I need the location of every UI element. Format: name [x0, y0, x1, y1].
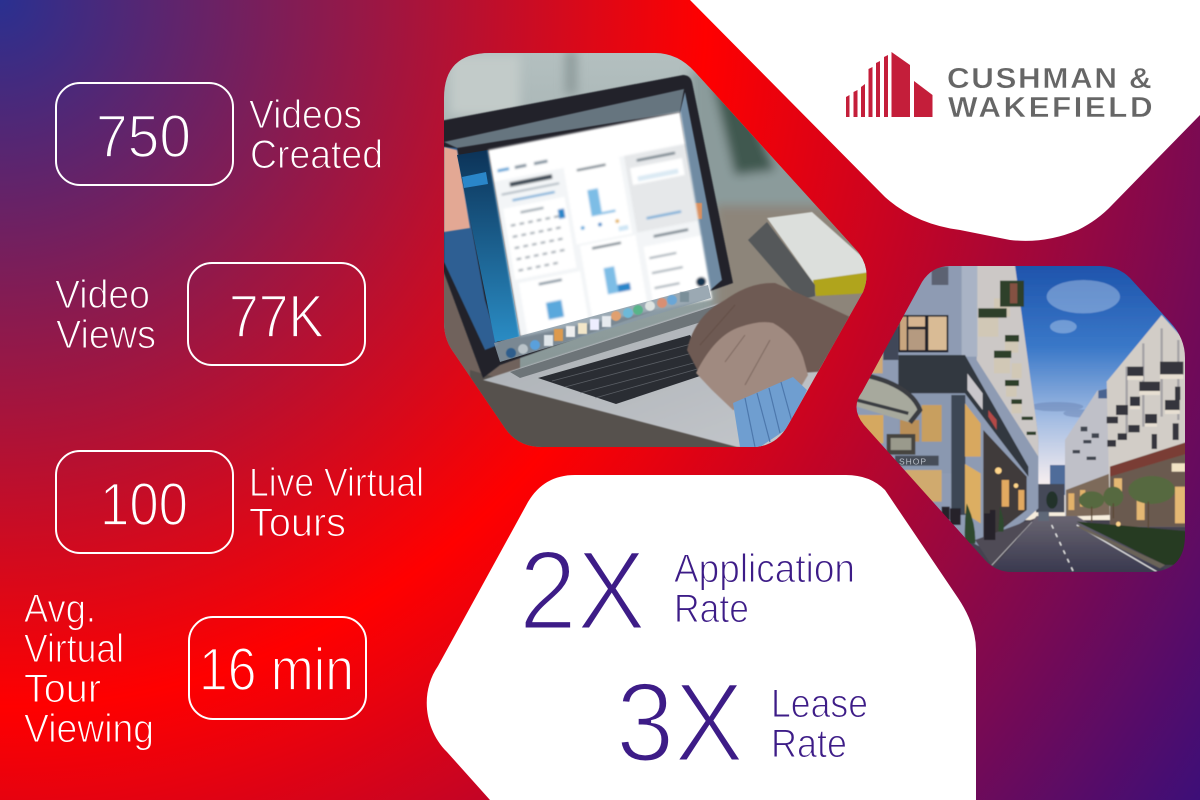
warm storefronts right	[1114, 478, 1185, 523]
stat number: 750	[96, 103, 191, 170]
photo: retail street at dusk	[856, 266, 1185, 572]
result label: Rate	[771, 722, 847, 766]
sidebar	[457, 150, 520, 342]
stat label	[55, 273, 156, 357]
perspective facade	[977, 253, 1038, 457]
desk lower-left	[444, 272, 520, 442]
stat label: Views	[56, 313, 156, 357]
stat label: Tour	[24, 667, 101, 711]
trees right	[1079, 476, 1175, 509]
shop sign	[895, 456, 939, 466]
stat label: Avg.	[24, 587, 96, 631]
sky	[1014, 266, 1180, 521]
lamps	[995, 467, 1121, 526]
result label: Rate	[674, 587, 749, 631]
stat: 100 live virtual tours	[56, 451, 424, 553]
result: 2X application rate	[519, 528, 855, 653]
canopy	[856, 378, 918, 423]
result label: Lease	[771, 682, 868, 726]
stat label: Virtual	[24, 627, 124, 671]
calendar card	[503, 197, 577, 280]
wordmark	[947, 63, 1153, 124]
window frame top	[932, 267, 948, 285]
far right building	[1107, 315, 1193, 527]
dark shop band	[898, 355, 1028, 477]
balconies left	[978, 298, 1022, 413]
wallpaper	[444, 147, 498, 350]
stat label: Live Virtual	[249, 461, 424, 505]
stat: 16 min average viewing	[24, 587, 366, 751]
left building upper	[856, 266, 1039, 546]
result label	[674, 547, 855, 631]
wordmark: CUSHMAN &	[947, 63, 1152, 95]
stat number: 16 min	[199, 636, 354, 703]
hanging sign	[887, 434, 915, 455]
stat label	[24, 587, 154, 751]
icon: building mark	[846, 52, 932, 117]
result label: Application	[674, 547, 855, 591]
shirt sleeve	[733, 377, 807, 447]
middle right building	[1065, 388, 1110, 517]
stat label: Created	[250, 133, 383, 177]
people	[942, 507, 995, 540]
right cards	[624, 144, 699, 233]
sidewalk	[975, 518, 1035, 565]
storefront glass	[965, 403, 981, 457]
stat label: Video	[55, 273, 150, 317]
laptop lid	[440, 75, 733, 378]
result label	[771, 682, 868, 766]
result: 3X lease rate	[616, 660, 868, 785]
stat label: Tours	[249, 501, 346, 545]
screen top strip	[444, 89, 684, 148]
laptop base	[483, 302, 826, 447]
left dark shop	[882, 326, 899, 360]
keyboard	[538, 335, 712, 404]
stat box	[189, 617, 366, 719]
stat label	[249, 461, 424, 545]
stat label: Videos	[249, 93, 362, 137]
logo: Cushman & Wakefield	[846, 52, 1153, 124]
hedge	[1077, 522, 1193, 565]
stat number: 77K	[229, 283, 324, 350]
photo base	[970, 519, 1185, 570]
video card	[519, 271, 589, 335]
panel: white results area	[427, 475, 976, 800]
result number: 3X	[616, 660, 744, 785]
balconies	[1107, 362, 1183, 449]
result number: 2X	[519, 528, 646, 653]
stat box	[56, 451, 233, 553]
stat label: Viewing	[24, 707, 154, 751]
hands	[687, 283, 852, 410]
road	[1001, 516, 1162, 572]
charts	[564, 157, 632, 245]
stat: 77K video views	[55, 263, 365, 365]
photo: laptop on desk	[440, 50, 875, 450]
wordmark: WAKEFIELD	[948, 92, 1153, 124]
dock	[494, 285, 711, 362]
stat: 750 videos created	[56, 83, 383, 185]
shop sign label: SHOP	[899, 456, 927, 466]
stat box	[188, 263, 365, 365]
stat box	[56, 83, 233, 185]
panel: white logo area	[690, 0, 1200, 241]
book on desk	[748, 212, 870, 300]
stat label	[249, 93, 383, 177]
distant tower	[1050, 465, 1065, 495]
stat number: 100	[100, 471, 188, 538]
dashboard window	[488, 112, 712, 337]
